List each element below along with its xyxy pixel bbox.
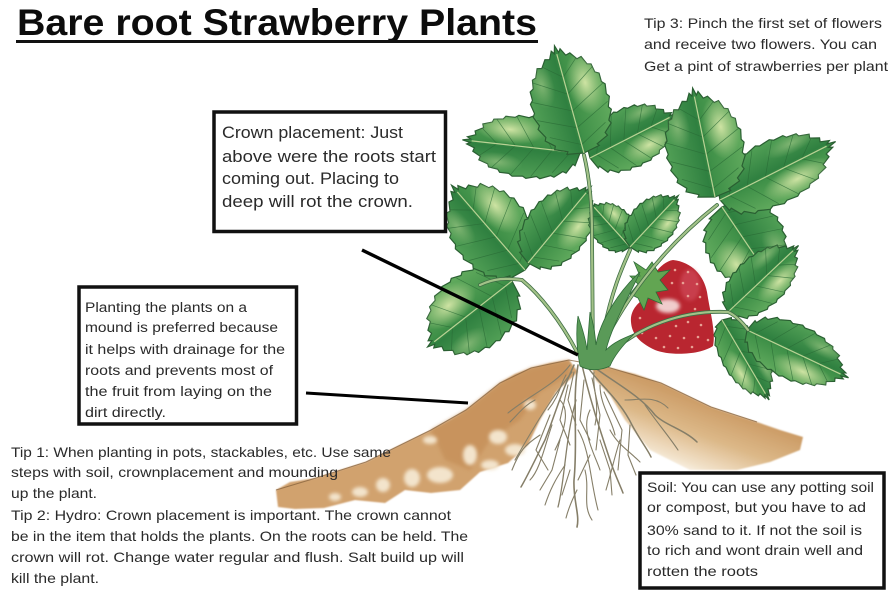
leaf: middle left xyxy=(422,159,555,296)
leaf: top right xyxy=(576,87,690,185)
callout: mound planting: mound is preferred because xyxy=(85,320,278,335)
leaf: bottom right lower xyxy=(703,309,788,411)
text block: tips 1 and 2: be in the item that holds the plants. On the roots can be held. The xyxy=(11,528,468,544)
leaf: top centre xyxy=(516,35,622,163)
crown and sheaths xyxy=(577,272,640,370)
text block: tip 3: and receive two flowers. You can xyxy=(644,36,877,52)
leaf: bottom left xyxy=(403,250,536,378)
callout: soil: 30% sand to it. If not the soil is xyxy=(647,522,862,538)
strawberry fruit xyxy=(631,260,714,354)
text block: tips 1 and 2: up the plant. xyxy=(11,485,97,501)
callout: crown placement: deep will rot the crown. xyxy=(222,193,413,211)
fruit calyx xyxy=(630,262,670,310)
leaf: upper right xyxy=(654,80,754,205)
stems xyxy=(480,155,748,362)
leaf: small right xyxy=(613,180,695,263)
text block: tips 1 and 2: steps with soil, crownplacement and mounding xyxy=(11,464,338,480)
leaf: rear right lower xyxy=(688,184,807,306)
leaf: small left xyxy=(576,190,645,261)
callout: mound planting: Planting the plants on a xyxy=(85,300,248,315)
text block: tip 3 xyxy=(644,15,888,74)
callout: soil: or compost, but you have to ad xyxy=(647,499,866,515)
callout: crown placement: coming out. Placing to xyxy=(222,170,399,188)
leaf: far right xyxy=(705,113,850,229)
title: Bare root Strawberry Plants xyxy=(17,2,537,43)
leaf: top left xyxy=(459,109,583,184)
text block: tips 1 and 2: Tip 1: When planting in pots, stackables, etc. Use same xyxy=(11,444,391,460)
callout: crown placement xyxy=(214,112,446,232)
callout: crown placement: Crown placement: Just xyxy=(222,124,403,142)
text block: tips 1 and 2: Tip 2: Hydro: Crown placement is important. The crown cannot xyxy=(11,507,451,523)
callout: mound planting: the fruit from laying on the xyxy=(85,384,272,399)
text block: tips 1 and 2: crown will rot. Change water regular and flush. Salt build up will xyxy=(11,549,464,565)
illustration: soil mound xyxy=(276,360,803,509)
leaf: middle xyxy=(504,167,615,283)
callout: mound planting: roots and prevents most of xyxy=(85,363,273,378)
text block: tip 3: Get a pint of strawberries per plant xyxy=(644,58,888,74)
callout: mound planting: it helps with drainage for the xyxy=(85,342,285,357)
text block: tips 1 and 2: kill the plant. xyxy=(11,570,99,586)
leaf: rear right small xyxy=(710,227,816,331)
illustration: roots xyxy=(508,364,697,527)
callout: soil: Soil: You can use any potting soil xyxy=(647,479,874,495)
arrow: mound pointer line xyxy=(306,393,468,403)
illustration: strawberry plant xyxy=(403,35,860,411)
callout: soil: to rich and wont drain well and xyxy=(647,542,863,558)
callout: soil: rotten the roots xyxy=(647,563,758,579)
arrow: crown pointer line xyxy=(362,250,578,355)
text block: tips 1 and 2 xyxy=(11,444,468,586)
callout: mound planting: dirt directly. xyxy=(85,405,166,420)
callout: mound planting xyxy=(79,287,296,424)
callout: crown placement: above were the roots start xyxy=(222,148,436,166)
leaf: bottom right xyxy=(735,305,860,403)
text block: tip 3: Tip 3: Pinch the first set of flowers xyxy=(644,15,882,31)
callout: soil xyxy=(640,473,884,588)
